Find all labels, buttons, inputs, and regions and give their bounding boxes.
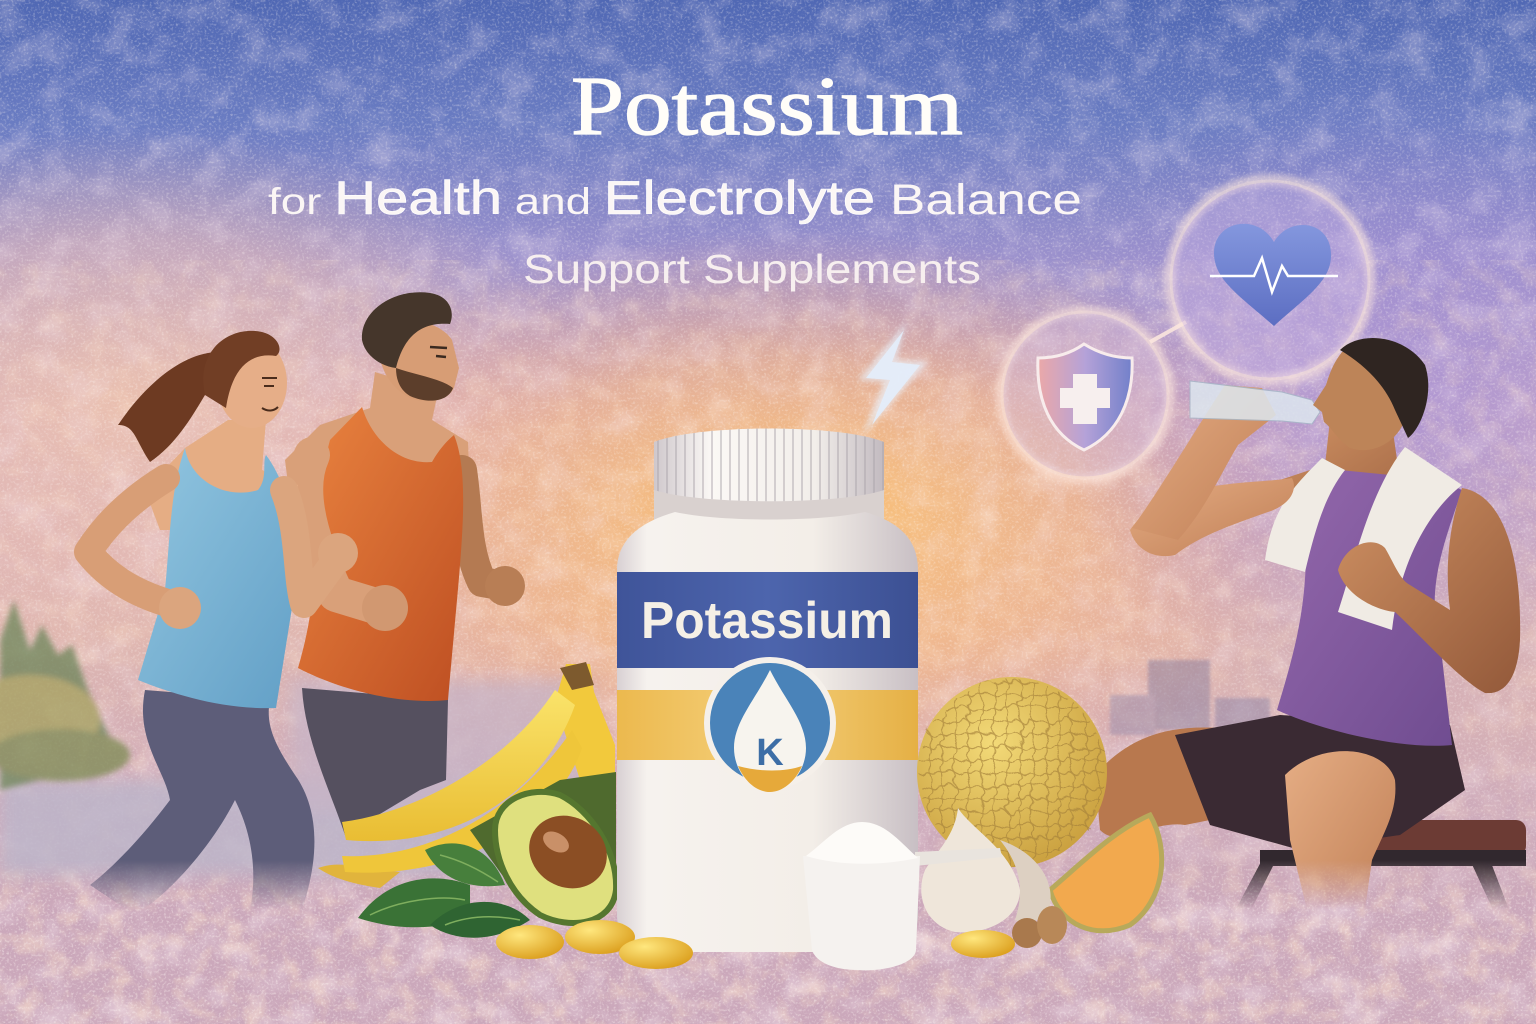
near arm with fist xyxy=(305,455,408,631)
softgel capsules xyxy=(496,920,1015,969)
hair xyxy=(203,331,280,408)
head xyxy=(378,320,459,401)
hair xyxy=(1340,338,1428,438)
foods: cantaloupe xyxy=(917,677,1162,931)
hair xyxy=(362,292,452,368)
legs xyxy=(90,690,314,920)
background: lake and far trees xyxy=(0,600,590,880)
measuring scoop with powder xyxy=(803,822,1002,970)
head xyxy=(217,338,287,428)
icon: shield with plus in glowing ring xyxy=(1001,311,1169,479)
person: woman running xyxy=(88,331,358,920)
head xyxy=(1313,351,1405,450)
subtitle line: for Health and Electrolyte Balance xyxy=(268,171,1082,224)
title xyxy=(268,60,1082,292)
foods: avocado xyxy=(470,772,620,923)
drinking upper arm xyxy=(1130,478,1294,556)
foods: banana bunch xyxy=(318,662,615,888)
stool xyxy=(1230,820,1526,925)
K emblem: K xyxy=(756,732,784,774)
water bottle xyxy=(1190,381,1320,424)
tank top xyxy=(298,407,463,701)
far arm with hand on towel xyxy=(1338,488,1520,693)
background: bench equipment xyxy=(1110,660,1270,735)
far arm with fist xyxy=(284,490,358,604)
beard xyxy=(396,368,453,401)
heading: Potassium: Potassium xyxy=(571,60,963,153)
neck and shoulders xyxy=(285,372,470,500)
eye and brow xyxy=(430,347,447,357)
neck and chest xyxy=(1280,420,1460,540)
person: seated man drinking xyxy=(1095,338,1526,930)
icon: heart with pulse in glowing ring xyxy=(1170,180,1370,380)
foods: spinach leaves xyxy=(358,843,530,938)
front leg xyxy=(1285,751,1395,930)
tank top xyxy=(138,448,298,708)
drinking forearm and hand xyxy=(1132,385,1276,540)
blue label band xyxy=(617,572,918,668)
body xyxy=(617,512,918,952)
far arm with fist xyxy=(462,470,525,606)
legs and shorts xyxy=(302,688,448,835)
K emblem xyxy=(704,657,836,792)
towel xyxy=(1265,447,1462,630)
label text: Potassium xyxy=(641,592,893,650)
supplement bottle xyxy=(617,428,918,952)
person: man running xyxy=(285,292,525,835)
neck xyxy=(654,485,884,525)
connector line between icons xyxy=(1150,322,1186,342)
near arm with fist xyxy=(88,478,201,629)
foreground: misty flowers xyxy=(0,860,1536,1024)
neck and shoulder xyxy=(145,420,298,530)
yellow band xyxy=(617,690,918,760)
shorts xyxy=(1175,715,1465,850)
rear leg xyxy=(1095,728,1260,837)
subtitle second line: Support Supplements xyxy=(523,246,981,292)
eye and smile xyxy=(262,378,278,411)
tank top xyxy=(1277,470,1462,746)
cap xyxy=(654,428,884,501)
ponytail xyxy=(118,352,215,462)
foods: garlic and nuts xyxy=(921,808,1067,948)
icon: lightning bolt xyxy=(858,322,928,436)
